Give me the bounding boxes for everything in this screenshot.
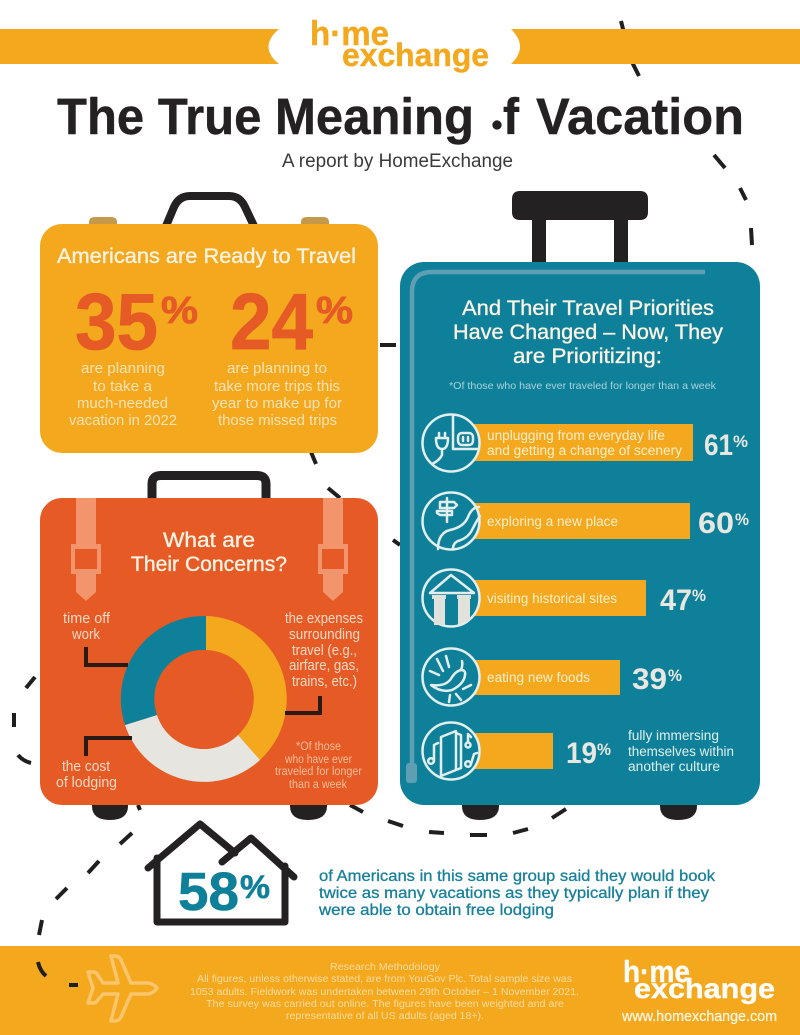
- heading: And Their Travel Priorities: [462, 297, 714, 320]
- bar: historical sites 47%: [470, 580, 706, 617]
- text: 24% description: those missed trips: [218, 412, 337, 429]
- text: free lodging statement: were able to obtain free lodging: [318, 902, 554, 919]
- bar: historical sites 47%: visiting historical sites: [487, 591, 617, 606]
- text: free lodging statement: [318, 868, 716, 919]
- panel: teal suitcase: [400, 191, 760, 820]
- suitcase body: [400, 262, 760, 805]
- stat: 24%: %: [316, 290, 353, 332]
- text: 24% description: take more trips this: [214, 378, 340, 395]
- label: time off work: [63, 610, 111, 643]
- footer logo: [623, 954, 775, 1004]
- stat: 24%: 24: [230, 277, 313, 366]
- stat: 58%: [178, 862, 270, 922]
- text: 35% description: much-needed: [77, 395, 168, 412]
- bar: immersing 19%: themselves within: [628, 744, 734, 759]
- label: cost of lodging: of lodging: [56, 774, 117, 791]
- footnote: *Of those: [296, 741, 341, 753]
- logo: [310, 15, 489, 73]
- suitcase clasps: [89, 217, 329, 225]
- label: time off work: time off: [63, 610, 111, 627]
- title: The True Meaning: [57, 88, 474, 145]
- bar: immersing 19%: fully immersing: [628, 728, 719, 743]
- bar: unplugging 61%: unplugging from everyday life: [487, 428, 665, 443]
- highlight strip: [412, 272, 705, 770]
- panel: yellow suitcase: [40, 196, 378, 453]
- stat: 58%: %: [240, 869, 270, 905]
- text: 35% description: vacation in 2022: [69, 412, 177, 429]
- footnote: [275, 741, 362, 791]
- website: www.homexchange.com: [621, 1008, 777, 1025]
- bar: unplugging 61%: 61: [704, 429, 733, 462]
- text: 24% description: [212, 360, 342, 429]
- footer logo: h·me: [623, 954, 690, 989]
- text: free lodging statement: twice as many vacations as they typically plan if they: [319, 885, 709, 902]
- right strap: [318, 498, 348, 601]
- bar: unplugging 61%: and getting a change of scenery: [487, 443, 682, 458]
- panel: footer: [0, 946, 800, 1035]
- bar: exploring 60%: %: [735, 510, 749, 529]
- bar: exploring 60%: exploring a new place: [487, 514, 618, 529]
- bar: historical sites 47%: 47: [660, 584, 692, 617]
- bar: new foods 39%: [470, 660, 682, 696]
- zip pull: [406, 763, 417, 783]
- icon: airplane: [88, 956, 157, 1021]
- label: expenses: airfare, gas,: [289, 657, 359, 674]
- label: cost of lodging: [56, 758, 117, 791]
- footer logo: exchange: [634, 973, 775, 1004]
- suitcase body: [40, 498, 378, 805]
- heading: Americans are Ready to Travel: [57, 245, 356, 268]
- heading: [131, 529, 287, 576]
- text: 24% description: year to make up for: [212, 395, 342, 412]
- label: expenses: surrounding: [289, 626, 360, 643]
- icon: historic building: [422, 570, 480, 626]
- bar: new foods 39%: %: [668, 666, 682, 685]
- research methodology text: representative of all US adults (aged 18+).: [286, 1010, 484, 1022]
- connector: time off work: [86, 647, 128, 665]
- heading: Have Changed – Now, They: [453, 321, 724, 344]
- bar: historical sites 47%: %: [692, 586, 706, 605]
- stat: 35%: %: [161, 290, 198, 332]
- bar: unplugging 61%: %: [733, 432, 748, 451]
- top banner left: [0, 29, 279, 64]
- bar: exploring 60%: 60: [698, 507, 734, 540]
- research methodology text: [190, 961, 579, 1022]
- label: expenses: travel (e.g.,: [292, 642, 357, 659]
- heading: What are: [163, 529, 255, 552]
- heading: Their Concerns?: [131, 553, 287, 576]
- suitcase handle: [152, 476, 266, 500]
- text: 35% description: [69, 360, 177, 429]
- label: expenses: trains, etc.): [292, 673, 357, 690]
- footer background: [0, 946, 800, 1035]
- research methodology text: Research Methodology: [330, 961, 441, 973]
- bar: immersing 19%: [470, 728, 734, 774]
- telescopic handle: [512, 191, 648, 264]
- icon: plug and socket: [422, 414, 480, 472]
- footnote: than a week: [289, 779, 347, 791]
- logo: exchange: [342, 37, 489, 73]
- left strap: [71, 498, 101, 601]
- footer flight path dashes: [38, 962, 78, 985]
- connector: expenses: [285, 696, 320, 713]
- icon: signpost and road: [422, 492, 480, 550]
- bar: immersing 19%: %: [597, 740, 611, 759]
- stat: 58%: 58: [178, 862, 239, 922]
- panel: orange suitcase: [40, 476, 378, 820]
- research methodology text: 1053 adults. Fieldwork was undertaken between 29th October – 1 November 2021.: [190, 986, 579, 998]
- text: 35% description: are planning: [81, 360, 165, 377]
- bar: immersing 19%: another culture: [628, 759, 720, 774]
- bar: unplugging 61%: [470, 424, 748, 462]
- subtitle: A report by HomeExchange: [282, 151, 513, 172]
- bar: exploring 60%: [470, 503, 749, 540]
- stat: 35%: 35: [75, 277, 158, 366]
- title: Vacation: [536, 88, 744, 145]
- label: cost of lodging: the cost: [62, 758, 111, 775]
- donut chart: [121, 616, 287, 782]
- connector: lodging: [86, 738, 132, 756]
- icon: house with 58%: [148, 824, 294, 922]
- text: free lodging statement: of Americans in this same group said they would book: [319, 868, 716, 885]
- logo: h·me: [310, 15, 389, 53]
- house outline: [148, 824, 294, 922]
- text: 35% description: to take a: [93, 378, 153, 395]
- bar: new foods 39%: 39: [632, 663, 667, 696]
- footnote: traveled for longer: [275, 766, 362, 778]
- suitcase body: [40, 224, 378, 453]
- research methodology text: The survey was carried out online. The figures have been weighted and are: [206, 998, 564, 1010]
- label: expenses: the expenses: [285, 610, 363, 627]
- bar: immersing 19%: 19: [566, 737, 597, 770]
- title: f: [503, 88, 520, 145]
- bar: new foods 39%: eating new foods: [487, 670, 590, 685]
- wheels: [462, 800, 697, 820]
- top banner right: [511, 29, 800, 64]
- label: time off work: work: [71, 626, 100, 643]
- wheels: [92, 800, 327, 820]
- icon: chili pepper: [422, 648, 480, 706]
- research methodology text: All figures, unless otherwise stated, are from YouGov Plc. Total sample size was: [197, 973, 572, 985]
- suitcase handle: [166, 196, 254, 226]
- heading: [453, 297, 724, 368]
- heading: are Prioritizing:: [513, 345, 662, 368]
- text: 24% description: are planning to: [227, 360, 327, 377]
- title: [57, 88, 744, 145]
- footnote: who have ever: [284, 754, 352, 766]
- icon: book and music: [422, 722, 480, 780]
- footnote: *Of those who have ever traveled for longer than a week: [449, 380, 717, 392]
- label: expenses: [285, 610, 363, 690]
